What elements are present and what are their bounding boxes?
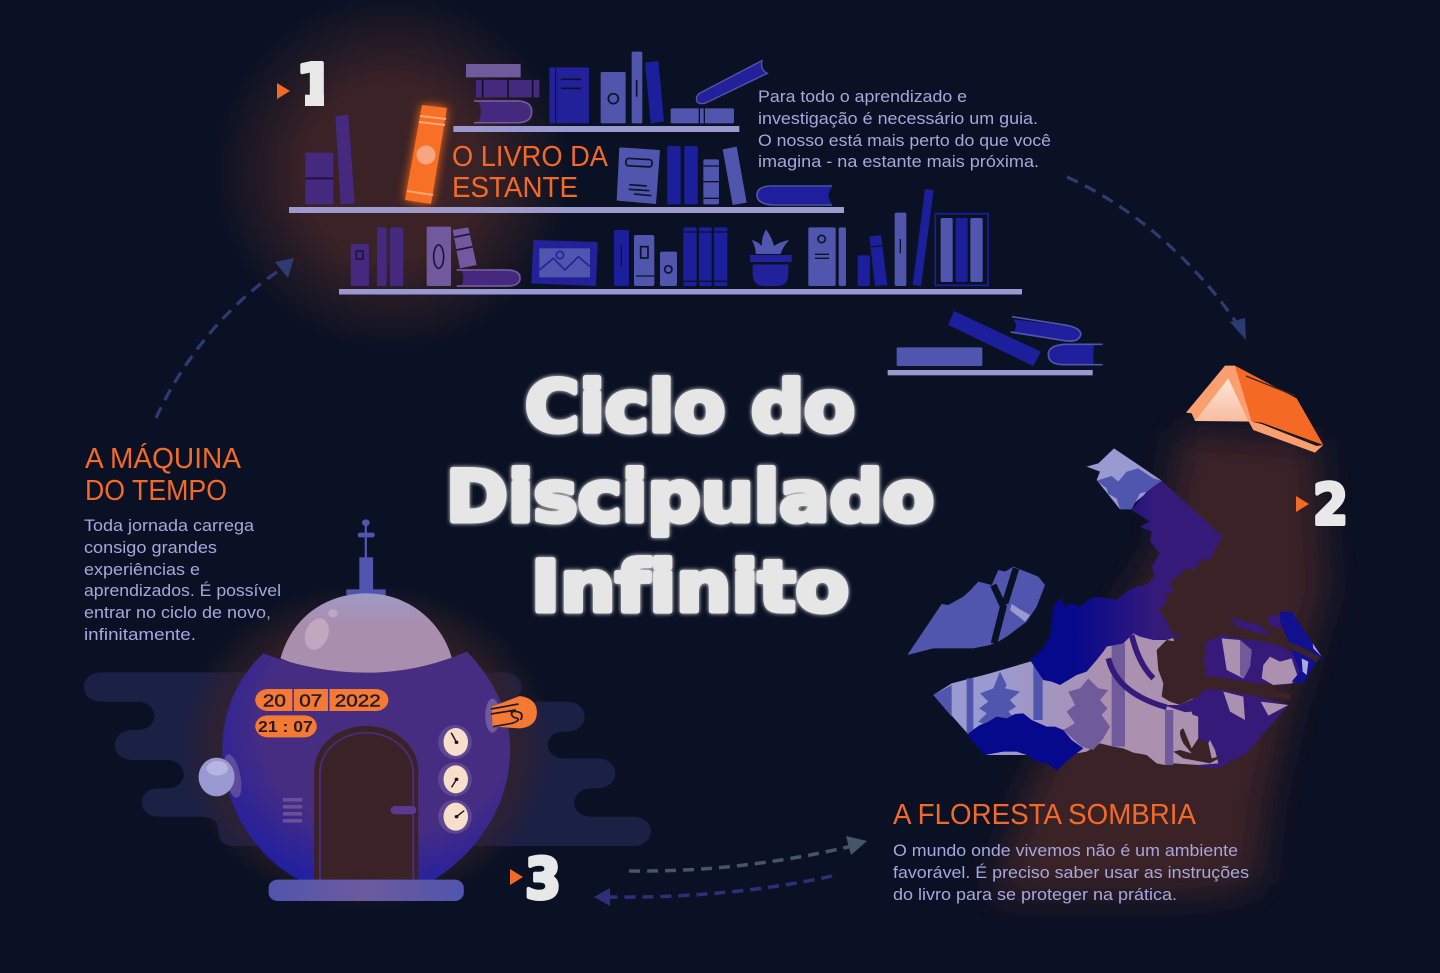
- illustration: time machine: [84, 519, 651, 910]
- vent: [283, 798, 302, 823]
- text block: machine description: experiências e: [84, 560, 200, 579]
- main canopy: [1030, 481, 1223, 685]
- right branch band: [1202, 633, 1313, 685]
- text block: shelf description: imagina - na estante mais próxima.: [758, 152, 1039, 171]
- dashed arrow: toward machine: [594, 876, 832, 906]
- forest plant: [1173, 728, 1225, 763]
- text block: machine description: entrar no ciclo de novo,: [84, 603, 271, 622]
- dashed arrow: toward forest: [629, 836, 867, 871]
- title: Infinito: [531, 546, 849, 628]
- door: [314, 726, 418, 880]
- title: [446, 366, 934, 628]
- step number 1: [277, 61, 324, 106]
- machine base: [269, 880, 464, 901]
- time display: 21 : 07: [258, 719, 313, 736]
- text block: machine description: Toda jornada carrega: [84, 516, 255, 535]
- heading: o livro da estante: ESTANTE: [452, 172, 578, 204]
- heading: a floresta sombria: A FLORESTA SOMBRIA: [893, 799, 1197, 831]
- left tree branch: [993, 568, 1016, 643]
- dashed arrow: shelf to book: [1067, 177, 1246, 340]
- bottom shelf plank: [339, 289, 1022, 294]
- tree trunks: [933, 660, 1043, 733]
- top shelf books: [453, 52, 767, 132]
- top light patch: [1087, 448, 1162, 509]
- machine glow: [179, 583, 554, 910]
- step number 2: 2: [1313, 473, 1348, 538]
- antenna: [346, 519, 386, 595]
- dashed arrow: machine to shelf: [156, 258, 294, 418]
- text block: machine description: consigo grandes: [84, 538, 217, 557]
- heading: a maquina do tempo: [85, 442, 242, 507]
- glow: forest beam: [990, 430, 1326, 895]
- purple branches: [1108, 635, 1167, 707]
- text block: machine description: infinitamente.: [84, 625, 196, 644]
- right light gaps: [1222, 638, 1298, 685]
- top leaf patch: [1097, 468, 1162, 509]
- step number 3: [510, 847, 561, 912]
- illustration: dark forest: [907, 448, 1322, 771]
- step number 1: 1: [296, 53, 335, 118]
- lower right light gaps: [1223, 692, 1288, 720]
- time display: [255, 715, 317, 737]
- small floating shelf with stack: [888, 311, 1103, 375]
- silhouette leaf mass: [1157, 637, 1207, 705]
- cloud behind machine: [84, 672, 651, 846]
- glowing orange book: [405, 105, 447, 204]
- heading: a maquina do tempo: A MÁQUINA: [85, 442, 242, 475]
- title: Discipulado: [446, 456, 934, 538]
- text block: machine description: [84, 516, 281, 644]
- step number 3: 3: [525, 847, 561, 912]
- text block: shelf description: [758, 87, 1051, 171]
- step number 2: [1296, 473, 1348, 538]
- orange lever: [491, 696, 537, 728]
- illustration: bookshelf: [289, 52, 1103, 375]
- text block: forest description: favorável. É preciso saber usar as instruções: [893, 863, 1249, 882]
- left bulb: [199, 753, 245, 799]
- upper right blue: [1280, 612, 1322, 683]
- fir tree right: [1063, 678, 1110, 750]
- title: Ciclo do: [525, 366, 855, 448]
- date display: 20: [263, 691, 286, 711]
- small leaf fragments: [1230, 615, 1282, 635]
- gauges: [438, 725, 472, 834]
- heading: a maquina do tempo: DO TEMPO: [85, 475, 227, 507]
- date display: 2022: [335, 691, 381, 711]
- middle shelf plank: [289, 207, 844, 213]
- forest floor scene: [933, 633, 1198, 765]
- date display: 07: [299, 691, 322, 711]
- left blue leaves: [907, 567, 1045, 655]
- middle shelf books: [305, 115, 747, 205]
- bottom shelf books: [351, 227, 727, 286]
- fir tree left: [978, 672, 1020, 727]
- text block: forest description: [893, 841, 1249, 904]
- text block: machine description: aprendizados. É possível: [84, 581, 281, 600]
- text block: shelf description: Para todo o aprendizado e: [758, 87, 967, 106]
- text block: forest description: O mundo onde vivemos não é um ambiente: [893, 841, 1238, 860]
- text block: shelf description: investigação é necessário um guia.: [758, 109, 1038, 128]
- lower right darkness: [1163, 688, 1288, 768]
- lying blue book: [757, 186, 832, 205]
- right silhouette branch: [1200, 633, 1318, 697]
- dome highlights: [301, 609, 338, 652]
- date display: [255, 689, 388, 711]
- glow: bookshelf spotlight: [214, 0, 570, 350]
- machine body: [222, 652, 510, 880]
- text block: forest description: do livro para se proteger na prática.: [893, 885, 1177, 904]
- plant and right-hand books: [750, 189, 988, 286]
- heading: o livro da estante: [452, 141, 609, 204]
- glass dome: [280, 593, 452, 673]
- text block: shelf description: O nosso está mais perto do que você: [758, 131, 1051, 150]
- right lever base: [485, 699, 500, 733]
- icon: open orange book: [1186, 366, 1323, 453]
- foreground bush: [967, 713, 1083, 771]
- heading: o livro da estante: O LIVRO DA: [452, 141, 609, 173]
- left lavender patch: [1010, 604, 1030, 622]
- pale leaf highlights: [1302, 643, 1322, 675]
